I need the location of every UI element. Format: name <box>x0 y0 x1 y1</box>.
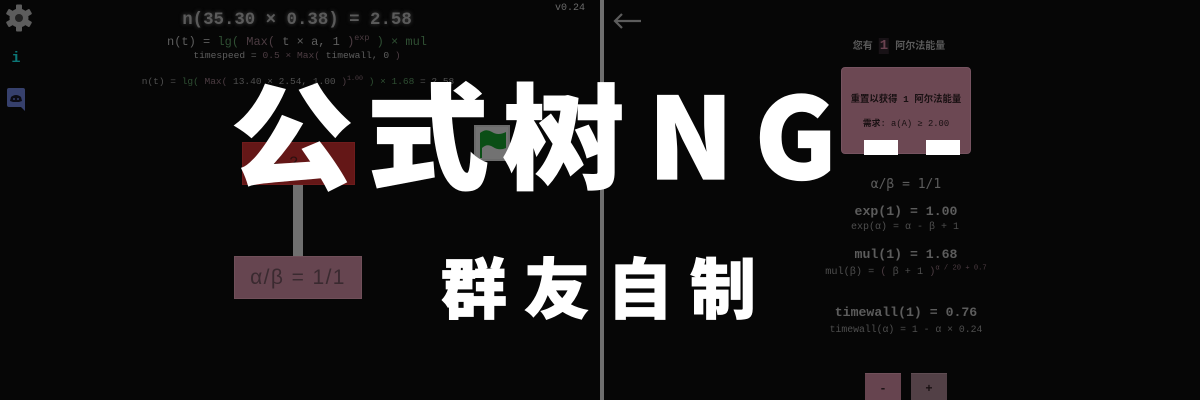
icon: green flag button <box>474 125 510 161</box>
formula: timespeed: timespeed = 0.5 × Max( timewall, 0 ) <box>193 50 401 61</box>
stat: mul formula: mul(β) = ( β + 1 )α / 20 + 0.7 <box>825 265 987 278</box>
icon: settings gear <box>6 4 32 32</box>
title: dash two <box>926 140 960 155</box>
stat: exp formula: exp(α) = α - β + 1 <box>851 222 959 233</box>
icon: discord <box>7 88 25 111</box>
panel: reset button <box>841 67 971 154</box>
formula: n(t): n(t) = lg( Max( t × a, 1 )exp ) × mul <box>167 33 427 49</box>
tree node: alpha beta: α/β = 1/1 <box>250 266 346 289</box>
formula: substituted values: n(t) = lg( Max( 13.40 × 2.54, 1.00 )1.00 ) × 1.68 = 2.58 <box>142 74 454 87</box>
stat: exp value: exp(1) = 1.00 <box>855 204 957 219</box>
button: minus: - <box>879 382 887 396</box>
version label: v0.24 <box>555 3 585 14</box>
reset requirement: 需求: a(A) ≥ 2.00 <box>863 119 949 129</box>
tree node: alpha beta <box>234 256 362 299</box>
tree node: red formula node: = 2.34 <box>270 154 327 172</box>
icon: info: i <box>11 50 21 67</box>
title: dash one <box>864 140 898 155</box>
tree connector <box>293 185 303 257</box>
button: minus <box>865 373 901 400</box>
button: plus <box>911 373 947 400</box>
alpha energy count: 您有 1 阿尔法能量 <box>853 38 945 54</box>
button: plus: + <box>925 382 933 396</box>
divider between panels <box>600 0 604 400</box>
ratio label: α/β = 1/1 <box>871 177 941 192</box>
stat: timewall formula: timewall(α) = 1 - α × 0.24 <box>830 324 982 335</box>
reset label: 重置以获得 1 阿尔法能量 <box>851 94 961 105</box>
stat: timewall value: timewall(1) = 0.76 <box>835 305 977 320</box>
subtitle: 群友自制 <box>441 237 773 333</box>
heading: formula value: n(35.30 × 0.38) = 2.58 <box>182 11 412 30</box>
title: latin part: NG <box>648 50 858 212</box>
icon: back arrow <box>614 13 641 29</box>
tree node: red formula node <box>242 142 355 185</box>
stat: mul value: mul(1) = 1.68 <box>855 247 957 262</box>
title: 公式树 <box>231 48 639 213</box>
